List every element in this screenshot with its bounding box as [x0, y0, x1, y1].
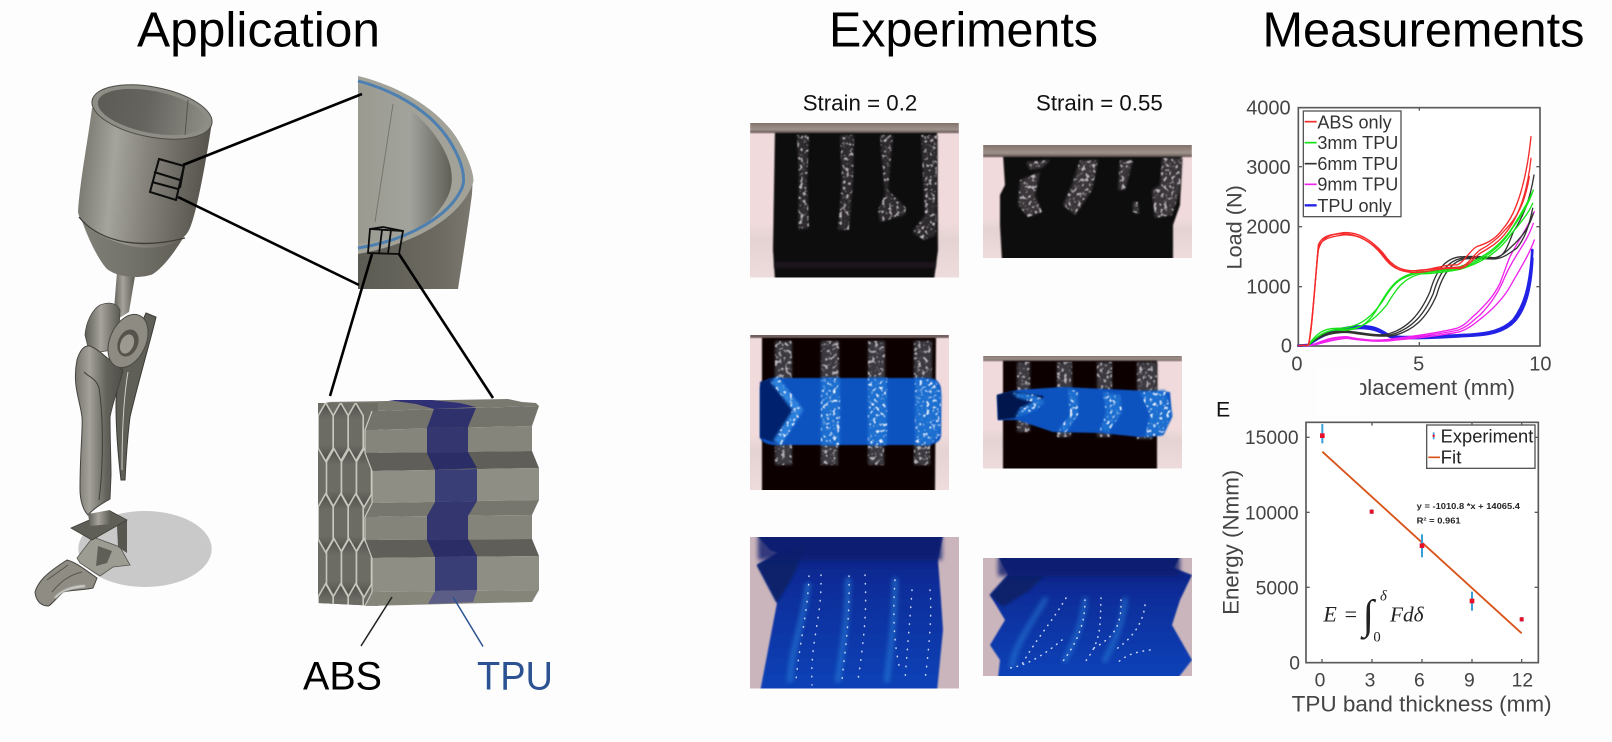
energy integral formula: 0 [1373, 630, 1381, 646]
photo: ABS at strain 0.2 [750, 123, 959, 278]
fit equation: = 0.961 [1427, 515, 1461, 525]
photo: 3mm band at strain 0.2 [750, 335, 949, 490]
white patch hiding part of the axis title [1317, 371, 1360, 414]
top ring [358, 76, 473, 254]
energy integral formula: = [1345, 602, 1357, 627]
x axis title: Displacement (mm) [1323, 375, 1515, 400]
ankle neck [88, 510, 111, 526]
outer wall [358, 175, 473, 289]
legend: Fit [1441, 446, 1462, 467]
shank [75, 346, 123, 515]
x tick labels: 12 [1512, 671, 1533, 692]
y tick labels: 4000 [1246, 98, 1291, 120]
fit equation: R [1417, 515, 1423, 525]
fit equation: y = -1010.8 *x + 14065.4 [1417, 501, 1520, 511]
title: Experiments: Experiments [829, 3, 1098, 58]
block edge highlights [365, 411, 372, 606]
photo: ABS at strain 0.55 [983, 145, 1192, 258]
photo: TPU only at strain 0.55 [983, 558, 1192, 676]
TPU leader line [453, 597, 483, 646]
x tick labels: 0 [1291, 354, 1303, 376]
blue TPU layer [358, 81, 464, 248]
energy integral formula: δ [1380, 589, 1387, 605]
energy chart [1216, 398, 1552, 717]
back spring [116, 313, 156, 480]
x tick labels [1291, 354, 1551, 376]
prosthetic leg [35, 76, 217, 606]
photo: 3mm band at strain 0.55 [983, 356, 1182, 468]
ABS only curves [1298, 137, 1531, 346]
y axis title: Energy (Nmm) [1218, 470, 1243, 615]
title: Application: Application [137, 3, 380, 58]
legend: ABS only [1317, 111, 1392, 132]
legend [1427, 425, 1535, 468]
wireframe cube on socket [150, 159, 184, 200]
load curves [1298, 137, 1534, 346]
socket body [78, 108, 212, 248]
fit equation: 2 [1423, 516, 1427, 522]
ABS leader line [361, 597, 392, 646]
x axis title: TPU band thickness (mm) [1292, 692, 1552, 717]
legend: 3mm TPU [1317, 132, 1398, 153]
y tick labels: 2000 [1246, 216, 1291, 238]
y tick labels: 0 [1281, 336, 1292, 358]
socket interior [94, 81, 210, 143]
energy integral formula: ∫ [1360, 592, 1377, 640]
TPU band [427, 408, 476, 428]
fit line [1322, 452, 1522, 633]
y tick labels: 10000 [1245, 503, 1299, 524]
knee disc [100, 308, 156, 374]
energy integral formula: E [1322, 602, 1337, 627]
panel: application [35, 76, 553, 698]
wireframe cube [368, 227, 403, 254]
fit equation [1417, 501, 1520, 525]
label: TPU: TPU [477, 654, 553, 698]
column heading: strain 0.2: Strain = 0.2 [803, 91, 917, 116]
rear layers [325, 399, 539, 411]
legend [1303, 111, 1401, 217]
plot area [1298, 108, 1540, 346]
legend: 6mm TPU [1317, 153, 1398, 174]
legend: 9mm TPU [1317, 174, 1398, 195]
y axis title: Load (N) [1222, 185, 1247, 269]
ABS faces [365, 406, 539, 430]
floor shadow [78, 511, 212, 587]
socket rim [87, 76, 217, 148]
ankle bracket [117, 520, 127, 553]
panel: experiments [750, 91, 1192, 692]
y tick labels: 3000 [1246, 157, 1291, 179]
y tick labels [1245, 428, 1300, 674]
x tick labels [1315, 671, 1533, 692]
load-displacement chart [1222, 98, 1551, 414]
3mm TPU curves [1298, 190, 1533, 346]
x tick labels: 9 [1464, 671, 1475, 692]
foot [35, 560, 97, 606]
ankle plate [71, 511, 127, 540]
honeycomb block [318, 399, 539, 606]
photo: TPU only at strain 0.2 [750, 537, 959, 688]
zoom callout lines [178, 94, 493, 398]
knee cylinder [85, 303, 120, 352]
panel: measurements [1216, 98, 1552, 717]
interior surface [358, 84, 452, 244]
panel letter: E [1216, 398, 1230, 422]
cone of socket [80, 215, 190, 277]
socket band line [79, 217, 185, 243]
x tick labels: 5 [1413, 354, 1424, 376]
cutaway of socket wall [358, 76, 473, 289]
legend: TPU only [1317, 195, 1392, 216]
y tick labels: 1000 [1246, 276, 1291, 298]
y tick labels [1246, 98, 1292, 358]
data points with error bars [1320, 424, 1524, 622]
hexagon end cells [318, 403, 378, 606]
x tick labels: 10 [1529, 354, 1551, 376]
legend: Experiment [1441, 425, 1534, 446]
plot area [1306, 422, 1538, 663]
6mm TPU curves [1298, 175, 1534, 346]
energy integral formula [1322, 589, 1425, 646]
title: Measurements: Measurements [1262, 3, 1584, 58]
heel truss [77, 537, 130, 576]
label: ABS: ABS [303, 654, 382, 698]
column heading: strain 0.55: Strain = 0.55 [1036, 91, 1163, 116]
x tick labels: 3 [1365, 671, 1375, 692]
9mm TPU curves [1298, 212, 1534, 346]
x tick labels: 6 [1414, 671, 1425, 692]
y tick labels: 15000 [1245, 428, 1299, 449]
energy integral formula: Fdδ [1389, 603, 1425, 627]
y tick labels: 5000 [1256, 578, 1299, 599]
tube [113, 272, 135, 322]
x tick labels: 0 [1315, 671, 1325, 692]
y tick labels: 0 [1289, 653, 1300, 674]
TPU only curves [1298, 250, 1532, 346]
